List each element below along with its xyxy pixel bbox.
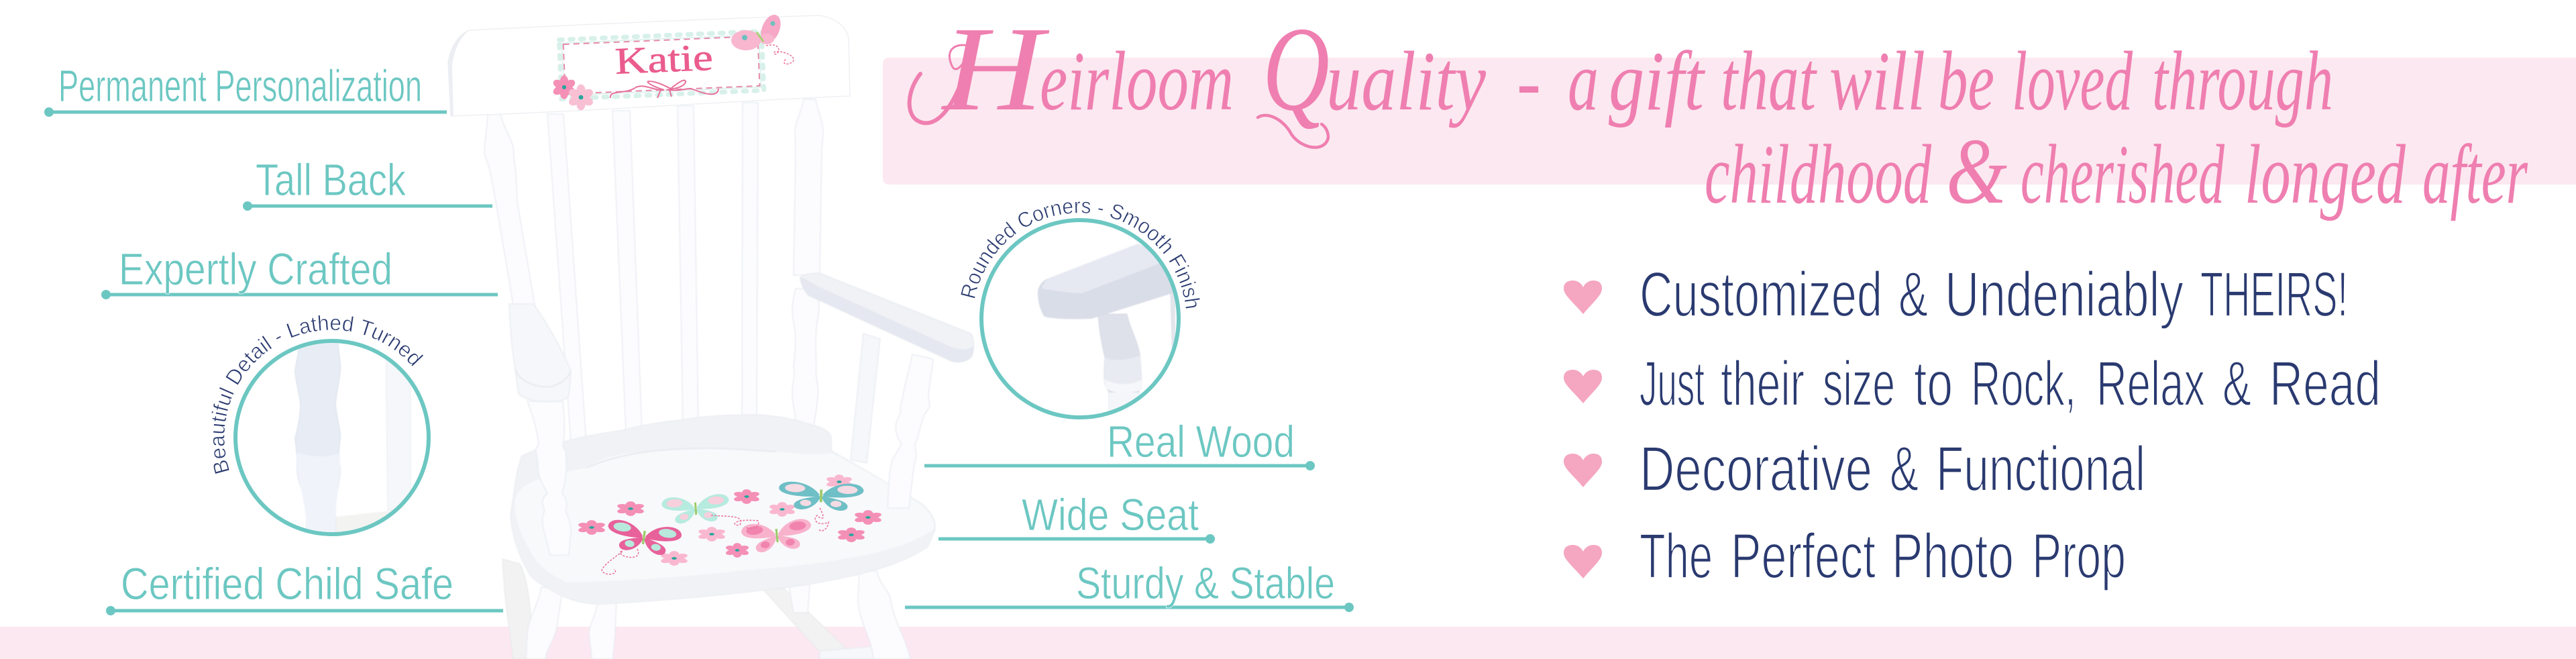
name: Katie: Katie [614,37,714,83]
benefit: photo prop: The [1640,521,1713,592]
benefit: just their size: size [1823,348,1895,419]
benefit: decorative: & [1890,434,1919,505]
benefit: just their size: their [1721,348,1805,419]
pink floor band [0,627,2576,659]
benefit: just their size: Rock, [1971,348,2076,419]
callout: Real Wood: Real Wood [1107,417,1295,467]
backrest with nameplate [448,12,850,116]
benefit: decorative: Decorative [1640,434,1872,505]
benefit: photo prop [1564,521,2126,592]
title line one: will [1829,35,1925,128]
rockers and legs [502,559,910,659]
callout: Wide Seat: Wide Seat [1022,490,1199,540]
benefit: just their size: to [1914,348,1953,419]
title line one: a [1568,35,1599,128]
curved caption: Rounded Corners - Smooth Finish [961,201,1200,309]
right front turned post [888,354,933,508]
title line two: longed [2245,128,2406,221]
back spindles [547,103,758,443]
benefit: customized: Undeniably [1945,259,2184,330]
benefit: just their size: Just [1640,348,1705,419]
benefit: customized: THEIRS! [2200,259,2348,330]
benefit: just their size [1564,348,2381,419]
inset circle: rounded corners detail [961,201,1200,419]
butterfly on backrest [731,12,794,64]
title line one: H [941,2,1050,136]
title line one: uality [1326,35,1486,128]
bow [610,81,718,98]
rocking chair photo illustration [448,12,974,659]
benefit: decorative [1564,434,2145,505]
title line one: Q [1263,2,1330,136]
title line one: eirloom [1040,35,1234,128]
title line two: cherished [2021,128,2225,221]
left armrest [509,304,571,402]
title line one: loved [2012,35,2133,128]
title line one: through [2152,35,2333,128]
callout: Permanent Personalization: Permanent Personalization [58,61,422,111]
callout: Tall Back [243,155,492,211]
seat [511,415,935,604]
title flourishes [910,45,1328,148]
back posts [484,99,823,431]
title script text [910,2,2528,223]
benefit: decorative: Functional [1936,434,2145,505]
benefit: just their size: Read [2269,348,2381,419]
callout: Permanent Personalization [44,61,447,117]
title line one: be [1938,35,1994,128]
curved caption: Beautiful Detail - Lathed Turned [212,315,423,474]
callout: Real Wood [924,417,1315,470]
seat butterflies [602,481,864,574]
callout: Wide Seat [938,490,1215,544]
title line one: gift [1609,35,1706,128]
nameplate frame [559,32,764,99]
benefit: customized [1564,259,2348,330]
benefit: photo prop: Photo [1892,521,2014,592]
callout: Certified Child Safe: Certified Child Safe [121,559,453,609]
left lower turned post [527,401,571,555]
title line two: childhood [1705,128,1932,221]
callout: Sturdy & Stable [905,558,1354,612]
benefit list [1564,259,2381,592]
title line one: that [1721,35,1817,128]
callout: Tall Back: Tall Back [256,155,406,205]
benefit: just their size: & [2222,348,2251,419]
flowers on backrest [551,75,595,110]
callout: Expertly Crafted: Expertly Crafted [119,244,392,295]
benefit: just their size: Relax [2096,348,2205,419]
pink title banner [883,58,2576,185]
benefit: customized: & [1898,259,1928,330]
right armrest [800,273,974,362]
benefit: photo prop: Perfect [1731,521,1876,592]
right arm spindle [851,334,880,463]
title line one: - [1517,35,1541,128]
callout: Sturdy & Stable: Sturdy & Stable [1076,558,1335,609]
benefit: customized: Customized [1640,259,1882,330]
benefit: photo prop: Prop [2032,521,2126,592]
seat flowers [576,474,883,566]
title line two: & [1946,119,2007,223]
inset circle: lathed turned detail [212,315,431,536]
